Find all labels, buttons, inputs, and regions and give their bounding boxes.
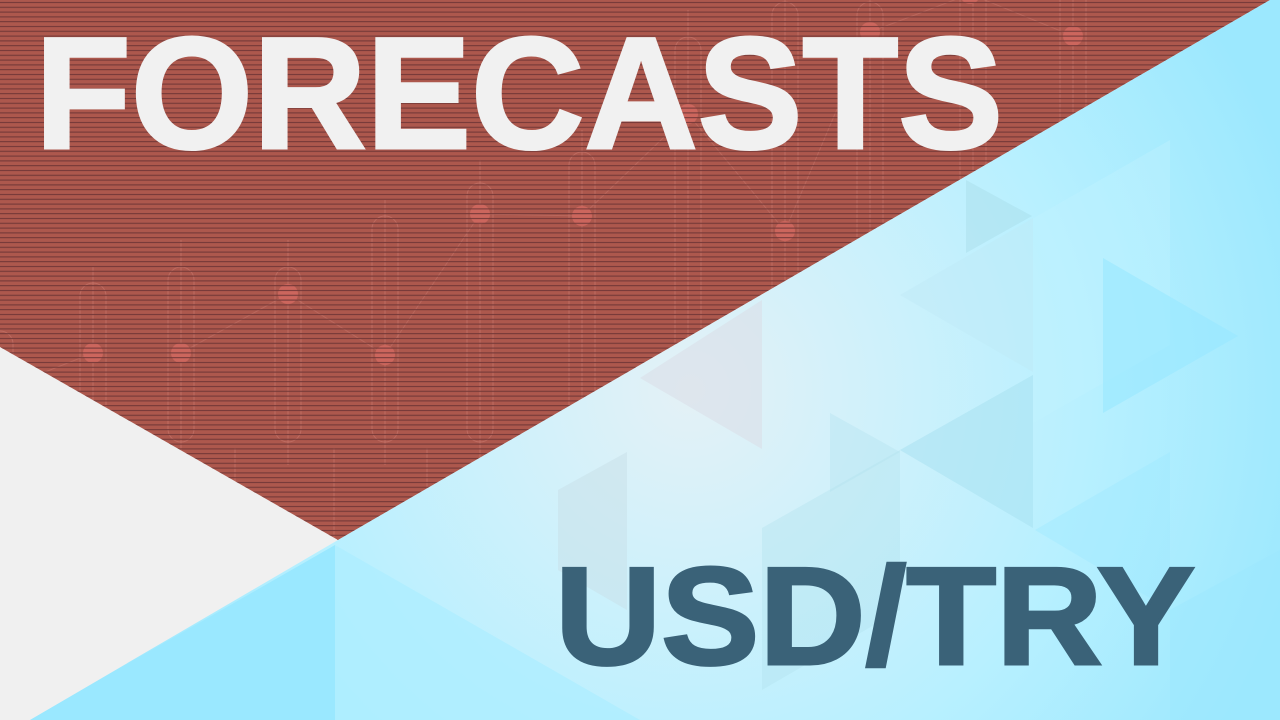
title: FORECASTS: FORECASTS: [35, 4, 1003, 182]
candlestick chart watermark: [0, 0, 1086, 540]
geometric triangle pattern: [30, 140, 1280, 720]
subtitle: USD/TRY: USD/TRY: [555, 539, 1195, 694]
panel: red striped chart area: [0, 0, 1270, 540]
chart data points: [83, 0, 1083, 365]
horizontal stripes overlay: [0, 2, 1266, 540]
